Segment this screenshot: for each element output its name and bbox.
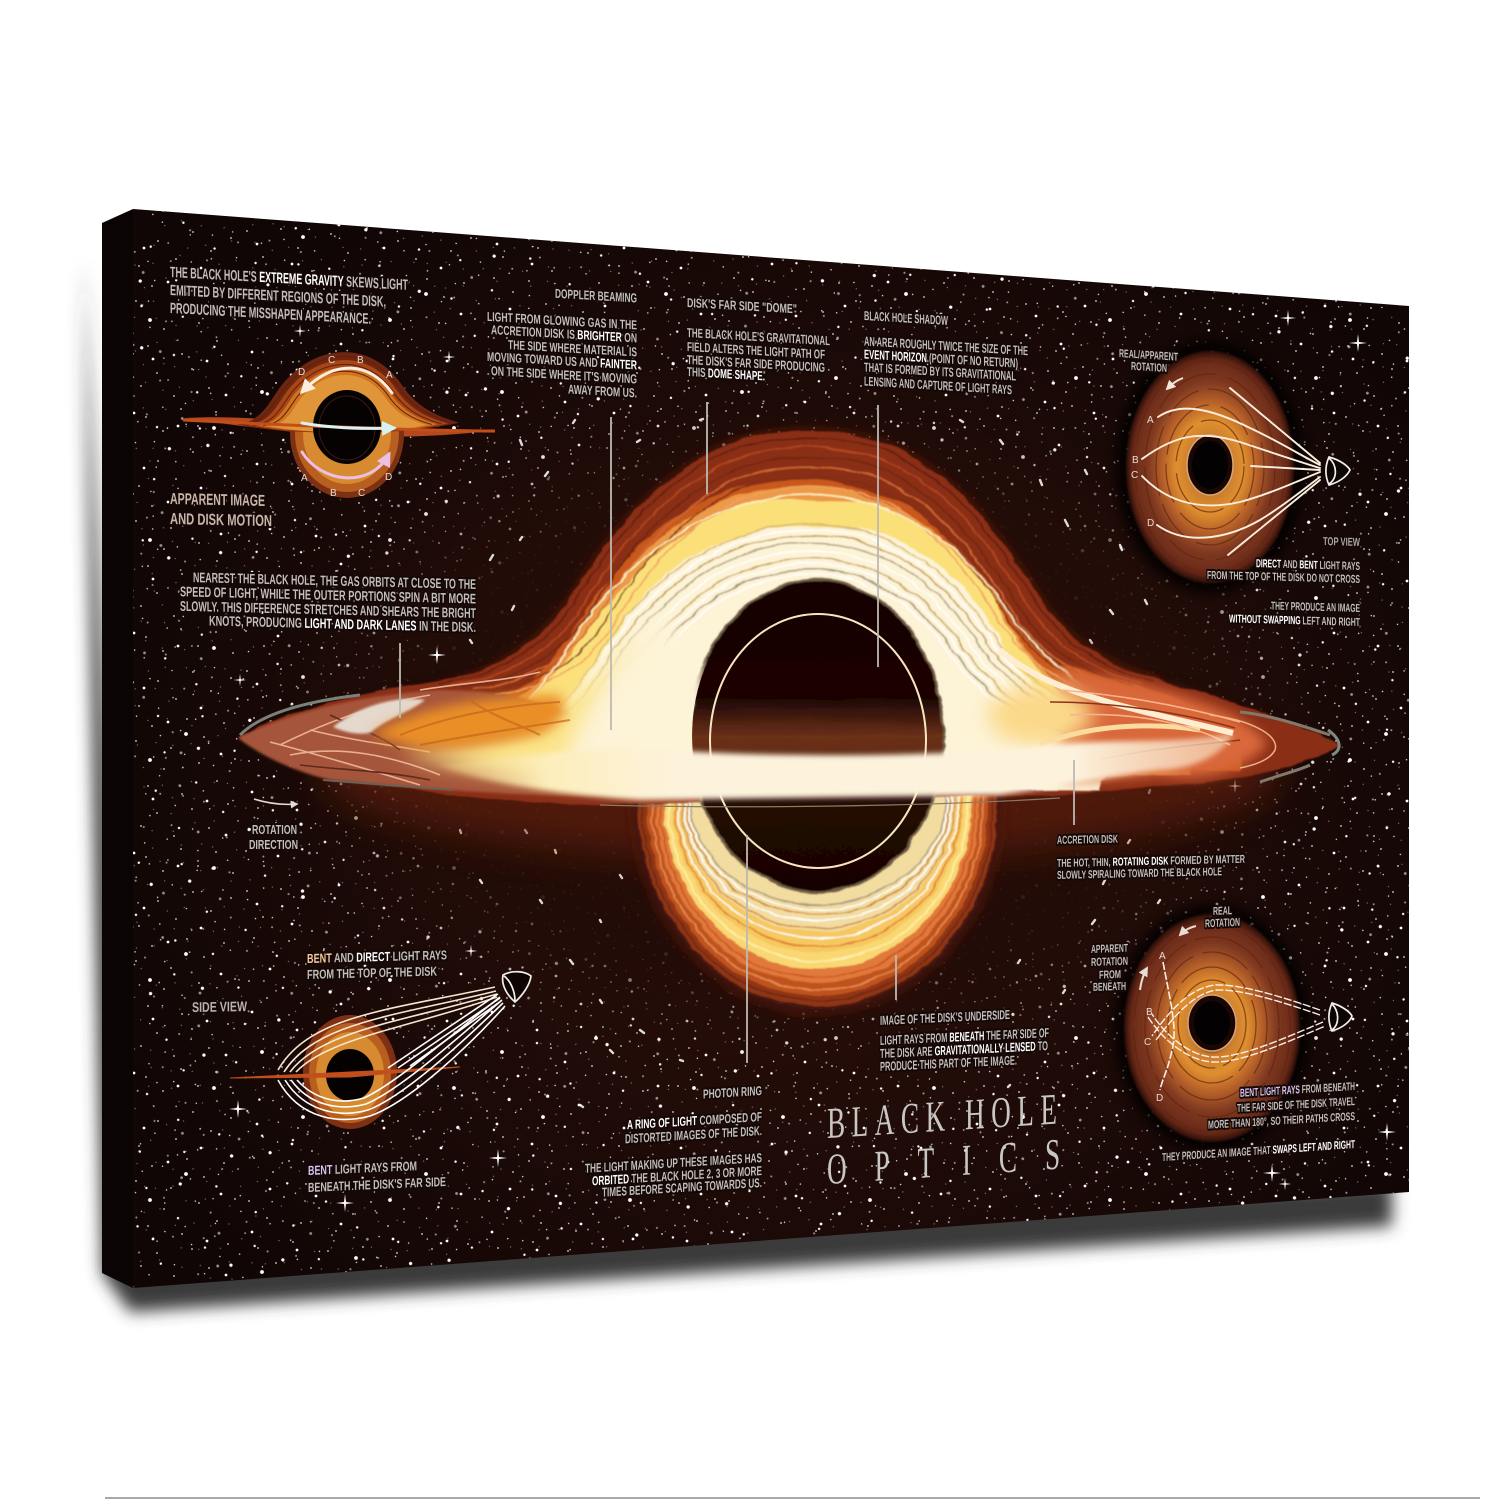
text: image of the disk's underside: LIGHT RAYS FROM BENEATH THE FAR SIDE OF bbox=[880, 1025, 1049, 1048]
eye icon bbox=[1326, 457, 1350, 485]
text: doppler beaming: DOPPLER BEAMING bbox=[555, 286, 637, 305]
text: real/apparent rotation: ROTATION bbox=[1131, 361, 1167, 375]
upper dome of the disk's far side bbox=[240, 431, 1342, 805]
drop shadow behind canvas bbox=[84, 262, 1392, 1312]
space background bbox=[133, 209, 1409, 1288]
text: image of the disk's underside: PRODUCE THIS PART OF THE IMAGE. bbox=[880, 1053, 1017, 1074]
right yellow blend bbox=[988, 685, 1092, 745]
disk letters bbox=[1131, 415, 1154, 529]
disk letters bbox=[1144, 951, 1166, 1104]
disk letters: A bbox=[301, 473, 308, 484]
text: black hole shadow bbox=[864, 308, 1028, 398]
star field bbox=[133, 209, 1409, 1288]
text: doppler beaming: MOVING TOWARD US AND FAINTER bbox=[487, 349, 637, 373]
text: extreme gravity bbox=[170, 264, 408, 330]
text: light and dark lanes: NEAREST THE BLACK HOLE, THE GAS ORBITS AT CLOSE TO THE bbox=[193, 569, 476, 592]
black hole shadow bbox=[690, 580, 944, 892]
disk letters: B bbox=[1146, 1007, 1153, 1018]
disk letters: A bbox=[1159, 951, 1166, 962]
disk letters: D bbox=[298, 367, 305, 378]
text: side view rays top bbox=[307, 947, 447, 982]
text: disk's far side dome: THE DISK'S FAR SIDE PRODUCING bbox=[687, 352, 825, 375]
text: photon ring bbox=[585, 1083, 762, 1201]
bent dashed light rays bbox=[1148, 962, 1323, 1090]
title bbox=[827, 1084, 1060, 1194]
central haze around the black hole bbox=[275, 400, 1335, 1060]
direct rays bbox=[388, 994, 501, 1068]
disk letters: D bbox=[1147, 518, 1154, 529]
text: top view explanation: WITHOUT SWAPPING LEFT AND RIGHT bbox=[1229, 613, 1360, 629]
text: apparent rotation from beneath: APPARENT bbox=[1091, 943, 1128, 956]
text: doppler beaming: AWAY FROM US. bbox=[568, 382, 637, 400]
text: image swaps left and right: THEY PRODUCE AN IMAGE THAT SWAPS LEFT AND RIGHT bbox=[1162, 1139, 1355, 1164]
text: bent light rays from beneath: THE FAR SIDE OF THE DISK TRAVEL bbox=[1237, 1096, 1355, 1115]
text: top view explanation: THEY PRODUCE AN IMAGE bbox=[1271, 601, 1360, 615]
text: bent light rays from beneath bbox=[1208, 1081, 1355, 1132]
cream rays from top of disk bbox=[278, 987, 497, 1072]
lensed stretched stars near the hole bbox=[460, 419, 1170, 1107]
text: apparent image heading: AND DISK MOTION bbox=[170, 511, 272, 530]
dome light orange layer bbox=[450, 486, 1190, 775]
disk letters bbox=[298, 355, 393, 499]
text: black hole shadow: BLACK HOLE SHADOW bbox=[864, 308, 948, 328]
disk letters: C bbox=[358, 488, 365, 499]
text: side view label: SIDE VIEW bbox=[192, 998, 248, 1015]
left gray-cream wedge bbox=[333, 699, 425, 734]
photon ring bbox=[710, 614, 926, 868]
right orange field bbox=[1060, 672, 1267, 781]
disk letters: A bbox=[386, 370, 393, 381]
text: disk's far side dome bbox=[687, 295, 830, 387]
light rays bbox=[1142, 388, 1320, 555]
text: side view rays beneath: BENEATH THE DISK'S FAR SIDE bbox=[308, 1174, 446, 1195]
text: apparent image heading: APPARENT IMAGE bbox=[170, 491, 265, 510]
text: image of the disk's underside: IMAGE OF THE DISK'S UNDERSIDE bbox=[880, 1007, 1010, 1028]
text: accretion disk: SLOWLY SPIRALING TOWARD THE BLACK HOLE bbox=[1057, 866, 1222, 882]
text: disk's far side dome: DISK'S FAR SIDE "DOME" bbox=[687, 295, 797, 316]
text: rotation direction: DIRECTION bbox=[249, 837, 298, 852]
text: rotation direction: ROTATION bbox=[252, 822, 297, 837]
text: light and dark lanes bbox=[180, 569, 476, 635]
text: light and dark lanes: KNOTS, PRODUCING LIGHT AND DARK LANES IN THE DISK. bbox=[209, 612, 476, 635]
text: side view rays top: BENT AND DIRECT LIGHT RAYS bbox=[307, 947, 447, 966]
text: real/apparent rotation: REAL/APPARENT bbox=[1119, 348, 1178, 364]
disk letters: B bbox=[357, 355, 364, 366]
canvas left side edge bbox=[102, 209, 133, 1288]
disk letters: B bbox=[1132, 455, 1139, 466]
eye icon bbox=[503, 972, 531, 1002]
disk letters: B bbox=[330, 488, 337, 499]
text: light and dark lanes: SPEED OF LIGHT, WHILE THE OUTER PORTIONS SPIN A BIT MORE bbox=[180, 583, 476, 606]
glow around the disk bbox=[300, 768, 1293, 879]
rotation arrows bbox=[1140, 926, 1196, 990]
text: side view rays top: FROM THE TOP OF THE DISK bbox=[307, 964, 437, 982]
title: OPTICS bbox=[827, 1129, 1060, 1194]
accretion disk band bbox=[238, 610, 1339, 807]
text: black hole shadow: AN AREA ROUGHLY TWICE THE SIZE OF THE bbox=[864, 334, 1028, 358]
dome outer red layer bbox=[240, 431, 1342, 805]
text: black hole shadow: EVENT HORIZON (POINT OF NO RETURN) bbox=[864, 347, 1018, 371]
text: real rotation: ROTATION bbox=[1205, 917, 1240, 930]
dome cream layer bbox=[520, 527, 1100, 790]
text: bent light rays from beneath: MORE THAN 180°, SO THEIR PATHS CROSS bbox=[1208, 1111, 1355, 1132]
central cream band bbox=[437, 733, 1233, 800]
rotation direction arrow bbox=[254, 799, 297, 804]
lower lensed image of the disk's underside bbox=[636, 794, 1000, 1024]
sparkle stars bbox=[229, 310, 1396, 1212]
diagram: apparent image and disk motion bbox=[183, 352, 495, 499]
text: real rotation: REAL bbox=[1213, 905, 1232, 918]
text: extreme gravity: PRODUCING THE MISSHAPEN APPEARANCE. bbox=[170, 300, 371, 328]
rotation arrow bbox=[1167, 378, 1183, 389]
text: apparent rotation from beneath bbox=[1091, 943, 1128, 994]
text: doppler beaming: ACCRETION DISK IS BRIGHTER ON bbox=[491, 322, 637, 345]
disk letters: A bbox=[1147, 415, 1154, 426]
right streaks bbox=[1000, 650, 1339, 782]
text: photon ring: DISTORTED IMAGES OF THE DISK. bbox=[625, 1123, 762, 1146]
eye icon bbox=[1329, 1003, 1352, 1031]
soft red halo of the dome bbox=[454, 424, 1164, 681]
text: top view explanation: DIRECT AND BENT LIGHT RAYS bbox=[1256, 558, 1360, 573]
disk letters: C bbox=[1131, 470, 1138, 481]
text: doppler beaming bbox=[487, 282, 637, 401]
left orange core bbox=[372, 695, 564, 748]
text: photon ring: PHOTON RING bbox=[703, 1083, 762, 1102]
dome streaks bbox=[438, 437, 1154, 705]
left orange lanes bbox=[400, 700, 570, 745]
text: side view rays beneath: BENT LIGHT RAYS FROM bbox=[308, 1158, 417, 1178]
text: photon ring: A RING OF LIGHT COMPOSED OF bbox=[627, 1109, 762, 1132]
text: disk's far side dome: THIS DOME SHAPE. bbox=[687, 364, 765, 383]
text: image of the disk's underside bbox=[880, 1005, 1049, 1074]
faint lines below band bbox=[600, 798, 1060, 807]
main black hole illustration bbox=[238, 431, 1342, 1013]
text: top view explanation: TOP VIEW bbox=[1323, 536, 1360, 549]
dome yellow layer bbox=[530, 498, 1106, 782]
text: apparent image heading bbox=[170, 491, 272, 530]
text: photon ring: TIMES BEFORE SCAPING TOWARDS US. bbox=[602, 1175, 762, 1200]
arrows: apparent motion bbox=[302, 368, 394, 478]
text: apparent rotation from beneath: ROTATION bbox=[1091, 956, 1128, 969]
diagram: view from beneath disk bbox=[1115, 905, 1352, 1151]
diagram: top view disk bbox=[1116, 341, 1350, 593]
text: image of the disk's underside: THE DISK ARE GRAVITATIONALLY LENSED TO bbox=[880, 1038, 1048, 1061]
text: black hole shadow: THAT IS FORMED BY ITS GRAVITATIONAL bbox=[864, 360, 1016, 384]
text: apparent rotation from beneath: FROM bbox=[1099, 969, 1121, 982]
text: real/apparent rotation bbox=[1119, 348, 1178, 376]
disk letters: D bbox=[385, 472, 392, 483]
text: disk's far side dome: FIELD ALTERS THE LIGHT PATH OF bbox=[687, 339, 825, 362]
text: disk's far side dome: THE BLACK HOLE'S GRAVITATIONAL bbox=[687, 325, 830, 348]
text: top view explanation: FROM THE TOP OF THE DISK DO NOT CROSS bbox=[1207, 570, 1360, 586]
disk letters: C bbox=[328, 355, 335, 366]
text: top view explanation bbox=[1207, 533, 1360, 629]
disk letters: D bbox=[1156, 1093, 1163, 1104]
text: accretion disk: ACCRETION DISK bbox=[1057, 834, 1118, 847]
left outer disk bbox=[238, 690, 640, 796]
diagram: side view bbox=[230, 972, 531, 1129]
text: doppler beaming: THE SIDE WHERE MATERIAL IS bbox=[508, 337, 637, 360]
dome orange layer bbox=[430, 479, 1240, 770]
disk letters: C bbox=[1144, 1037, 1151, 1048]
text: black hole shadow: LENSING AND CAPTURE OF LIGHT RAYS bbox=[864, 374, 1012, 397]
text: apparent rotation from beneath: BENEATH bbox=[1093, 981, 1126, 994]
left yellow sweep and flank cream glow, kept out of the hole bbox=[400, 610, 720, 786]
text: real rotation bbox=[1205, 905, 1240, 930]
text: accretion disk: THE HOT, THIN, ROTATING DISK FORMED BY MATTER bbox=[1057, 854, 1245, 870]
bent rays from beneath bbox=[278, 997, 505, 1119]
text: side view rays beneath bbox=[308, 1157, 446, 1195]
text: extreme gravity: EMITTED BY DIFFERENT REGIONS OF THE DISK, bbox=[170, 282, 386, 311]
text: doppler beaming: ON THE SIDE WHERE IT'S MOVING bbox=[491, 363, 637, 386]
text: bent light rays from beneath: BENT LIGHT RAYS FROM BENEATH bbox=[1240, 1081, 1355, 1100]
text: photon ring: THE LIGHT MAKING UP THESE IMAGES HAS bbox=[585, 1150, 762, 1176]
text: photon ring: ORBITED THE BLACK HOLE 2, 3 OR MORE bbox=[592, 1163, 762, 1188]
title: BLACK HOLE bbox=[827, 1084, 1057, 1148]
text: extreme gravity: THE BLACK HOLE'S EXTREME GRAVITY SKEWS LIGHT bbox=[170, 264, 408, 294]
text: doppler beaming: LIGHT FROM GLOWING GAS IN THE bbox=[487, 309, 637, 333]
pointer lines bbox=[400, 402, 1074, 1063]
canvas front: poster artwork bbox=[133, 209, 1409, 1288]
left pink lanes and rims bbox=[240, 672, 540, 790]
text: accretion disk bbox=[1057, 831, 1245, 882]
text: light and dark lanes: SLOWLY. THIS DIFFERENCE STRETCHES AND SHEARS THE BRIGHT bbox=[180, 598, 476, 621]
bottom edge line of photo bbox=[105, 1497, 1480, 1499]
text: rotation direction bbox=[249, 822, 298, 852]
